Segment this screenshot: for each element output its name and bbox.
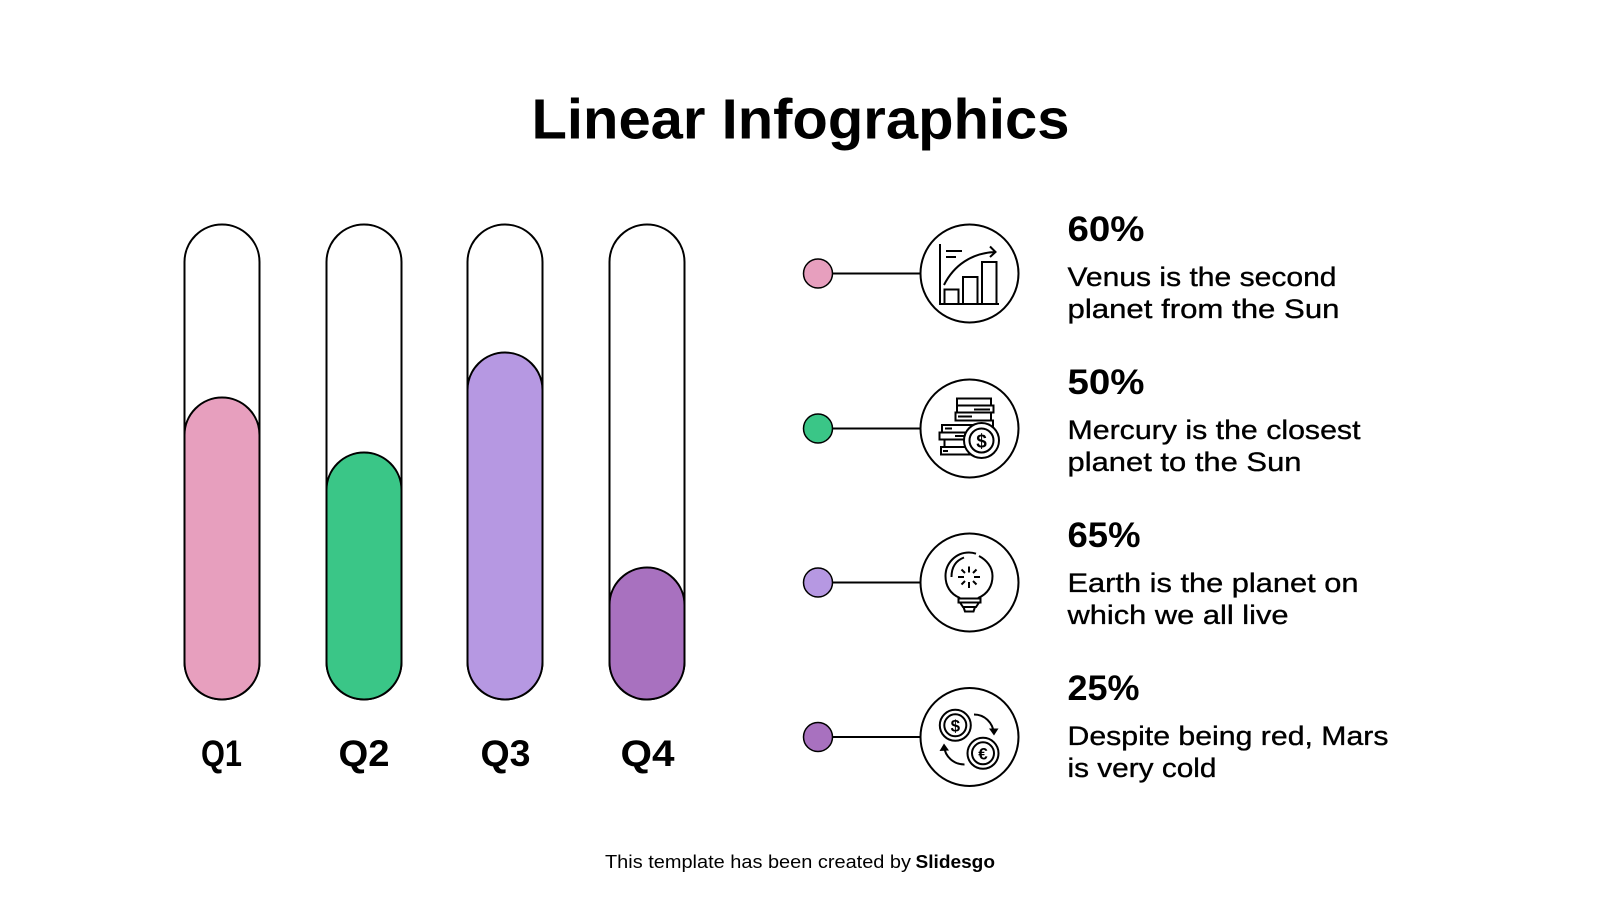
text: Earth: 65% [1068,516,1140,555]
label: Q3: Q3 [480,733,530,774]
text: Mercury: Mercury is the closest [1068,415,1361,445]
icon: growth chart [920,224,1018,322]
connector: Earth [804,568,920,597]
text: Venus [1068,210,1340,324]
footer credit: Slidesgo [916,851,995,872]
text: Venus: planet from the Sun [1068,294,1340,324]
bar: Q3 [468,224,542,700]
connector: Mars [804,722,920,752]
text: Mars: 25% [1068,669,1140,708]
text: Earth: which we all live [1066,600,1288,630]
text: Venus: Venus is the second [1068,262,1336,292]
icon: currency exchange: € [978,744,988,764]
text: Earth: Earth is the planet on [1068,568,1358,598]
connector: Mercury [804,414,920,443]
title: Linear Infographics [532,88,1070,152]
text: Venus: 60% [1068,210,1144,249]
bar: Q2 [326,224,402,700]
icon: coin stacks [920,380,1018,478]
text: Mars: is very cold [1068,753,1216,783]
footer credit: This template has been created by [605,851,912,872]
icon: coin stacks: $ [976,432,987,452]
text: Mercury [1068,363,1361,477]
text: Mercury: 50% [1068,363,1144,402]
bar chart [184,224,684,700]
label: Q1: Q1 [201,733,242,774]
icon: light bulb [920,534,1018,632]
icon: currency exchange [920,688,1018,786]
label: Q4: Q4 [620,733,675,774]
text: Mercury: planet to the Sun [1068,447,1302,477]
text: Mars: Despite being red, Mars [1068,721,1388,751]
label: Q2: Q2 [338,733,390,774]
icon: currency exchange: $ [951,716,961,736]
bar: Q1 [184,224,260,700]
text: Earth [1066,516,1358,630]
text: Mars [1068,669,1388,783]
bar: Q4 [610,224,684,700]
connector: Venus [804,259,920,288]
